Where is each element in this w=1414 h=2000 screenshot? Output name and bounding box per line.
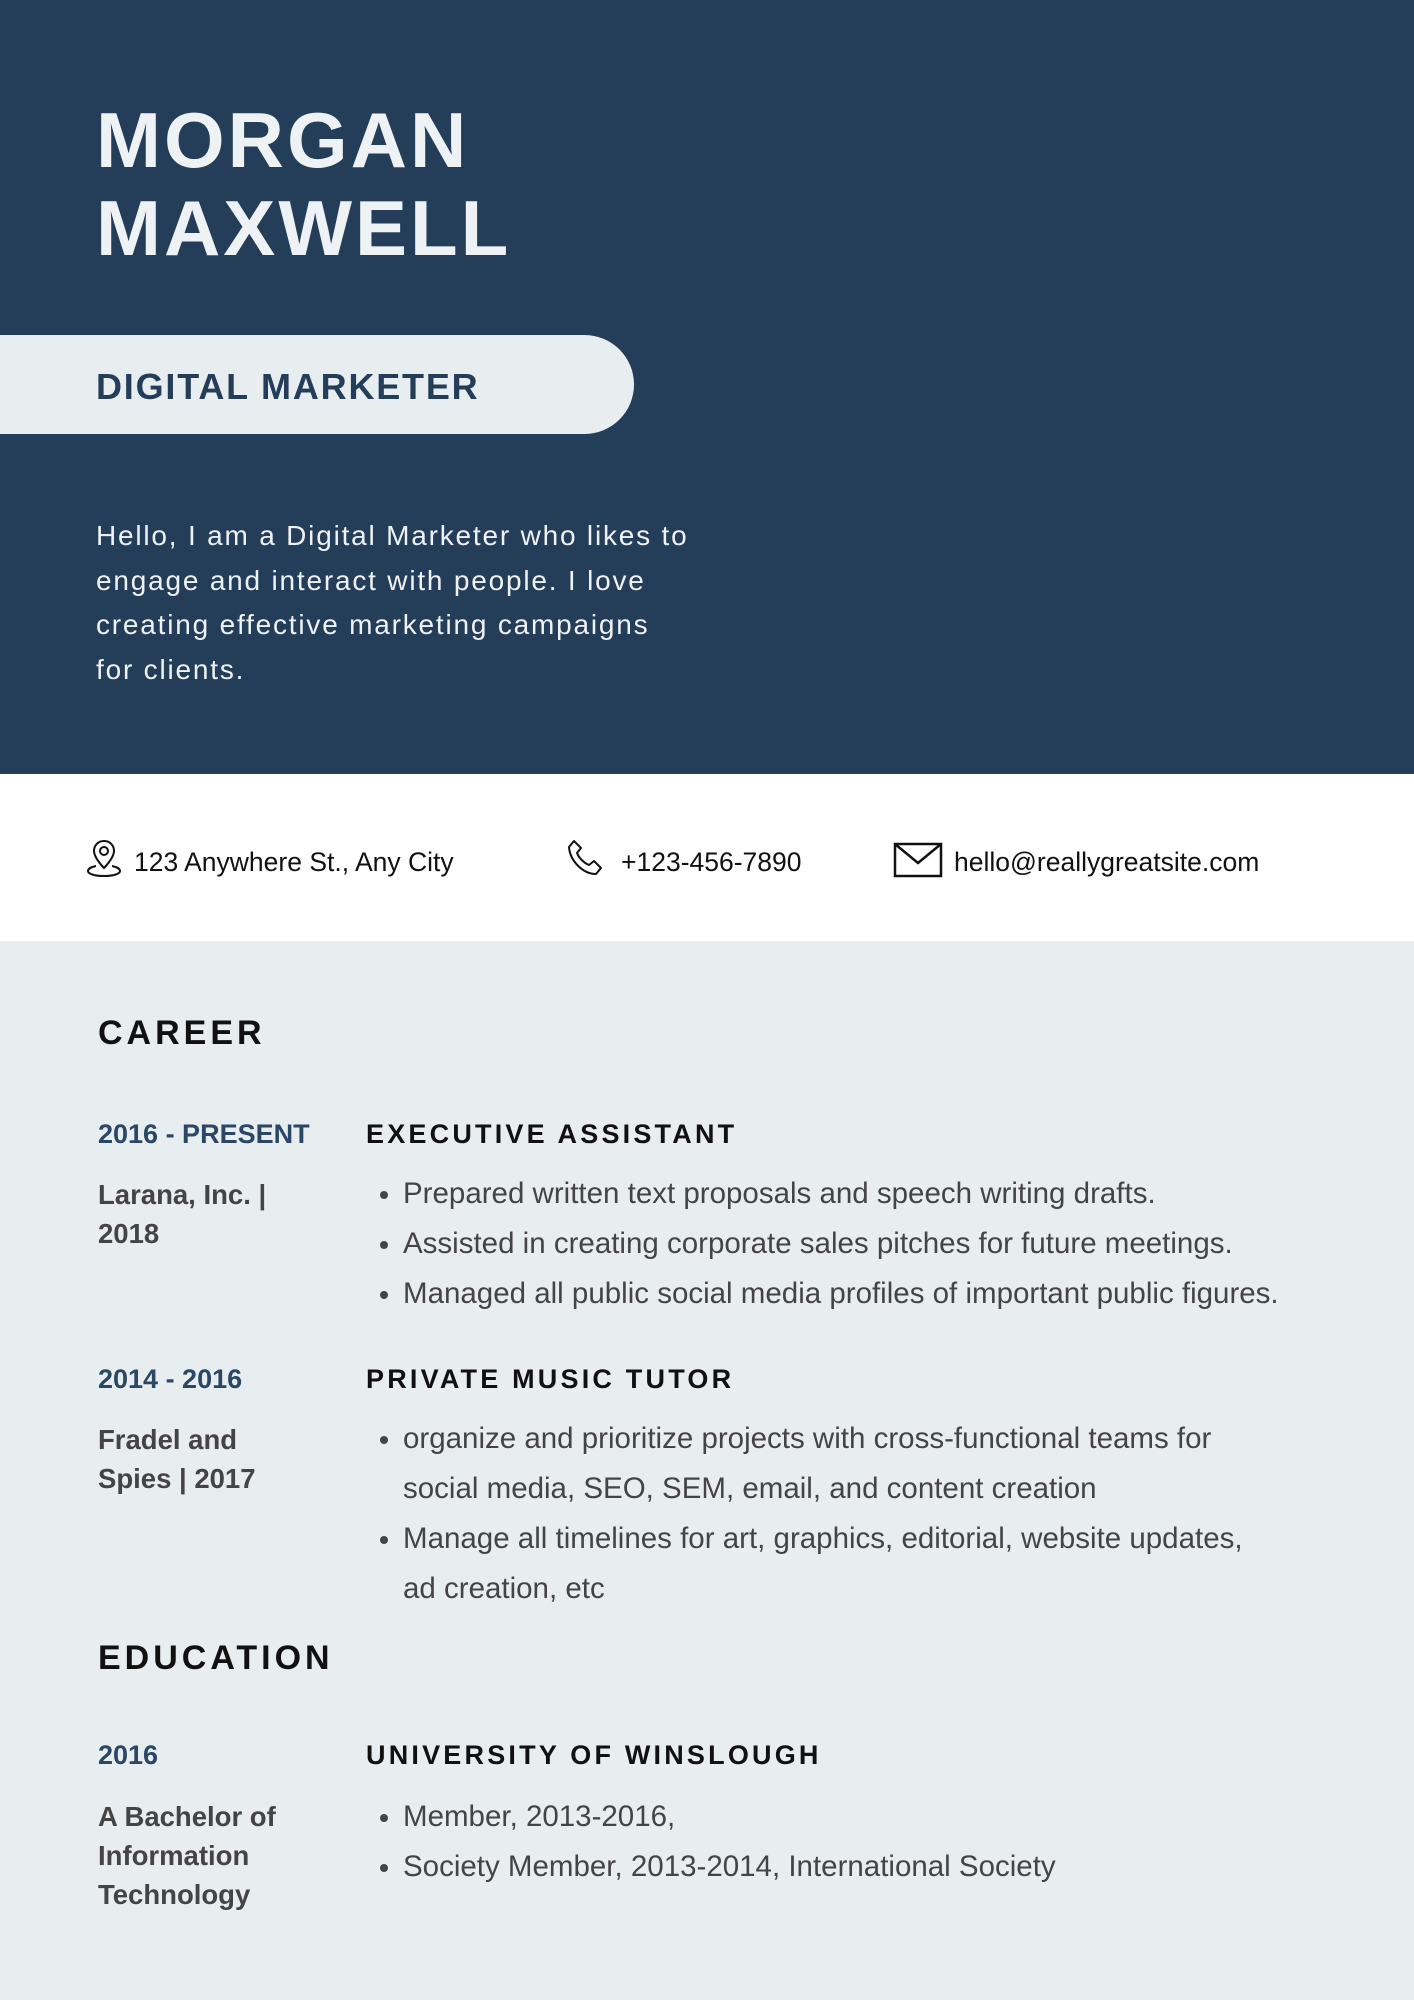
icon: mail <box>894 842 942 878</box>
heading: education: EDUCATION <box>98 1639 334 1677</box>
header background <box>0 0 1414 774</box>
text block: intro: creating effective marketing campaigns <box>96 609 649 640</box>
job 2 bullets <box>380 1422 1243 1605</box>
job 1 bullets <box>380 1177 1279 1310</box>
icon: phone <box>568 840 602 875</box>
edu degree: Information <box>98 1840 249 1871</box>
edu degree: A Bachelor of <box>98 1801 276 1832</box>
pill: job title <box>0 335 634 434</box>
job 1 bullets: Assisted in creating corporate sales pitches for future meetings. <box>403 1227 1233 1260</box>
edu year: 2016 <box>98 1740 158 1770</box>
job 2 company: Spies | 2017 <box>98 1463 256 1494</box>
job 1 bullets: Managed all public social media profiles of important public figures. <box>403 1277 1279 1310</box>
job 1 years: 2016 - PRESENT <box>98 1119 310 1149</box>
title: name <box>96 96 511 272</box>
contact: phone: +123-456-7890 <box>621 847 802 877</box>
job 1 company: Larana, Inc. | <box>98 1179 266 1210</box>
contact band <box>0 774 1414 941</box>
contact: email: hello@reallygreatsite.com <box>954 847 1259 877</box>
job 1 bullets: Prepared written text proposals and speech writing drafts. <box>403 1177 1156 1210</box>
heading: career: CAREER <box>98 1014 266 1052</box>
job 2 bullets: organize and prioritize projects with cross-functional teams for <box>403 1422 1211 1455</box>
edu bullets: Society Member, 2013-2014, International Society <box>403 1850 1056 1883</box>
icon: location <box>87 840 121 877</box>
job 2 company <box>98 1424 256 1494</box>
edu degree: Technology <box>98 1879 250 1910</box>
job 2 bullets: social media, SEO, SEM, email, and content creation <box>403 1472 1097 1505</box>
job 2 company: Fradel and <box>98 1424 237 1455</box>
text block: intro: engage and interact with people. I love <box>96 565 646 596</box>
job 2 years: 2014 - 2016 <box>98 1364 242 1394</box>
edu school: UNIVERSITY OF WINSLOUGH <box>366 1740 822 1770</box>
job 2 bullets: ad creation, etc <box>403 1572 605 1605</box>
contact: address: 123 Anywhere St., Any City <box>134 847 454 877</box>
job 1 company <box>98 1179 266 1249</box>
edu bullets: Member, 2013-2016, <box>403 1800 675 1833</box>
edu bullets <box>380 1800 1056 1883</box>
job 1 title: EXECUTIVE ASSISTANT <box>366 1119 737 1149</box>
pill: job title: DIGITAL MARKETER <box>96 366 479 407</box>
job 1 company: 2018 <box>98 1218 159 1249</box>
text block: intro: Hello, I am a Digital Marketer who likes to <box>96 520 688 551</box>
job 2 title: PRIVATE MUSIC TUTOR <box>366 1364 734 1394</box>
edu degree <box>98 1801 276 1910</box>
job 2 bullets: Manage all timelines for art, graphics, editorial, website updates, <box>403 1522 1243 1555</box>
text block: intro: for clients. <box>96 654 245 685</box>
text block: intro <box>96 520 688 685</box>
title: name: MORGAN <box>96 96 469 184</box>
title: name: MAXWELL <box>96 184 511 272</box>
